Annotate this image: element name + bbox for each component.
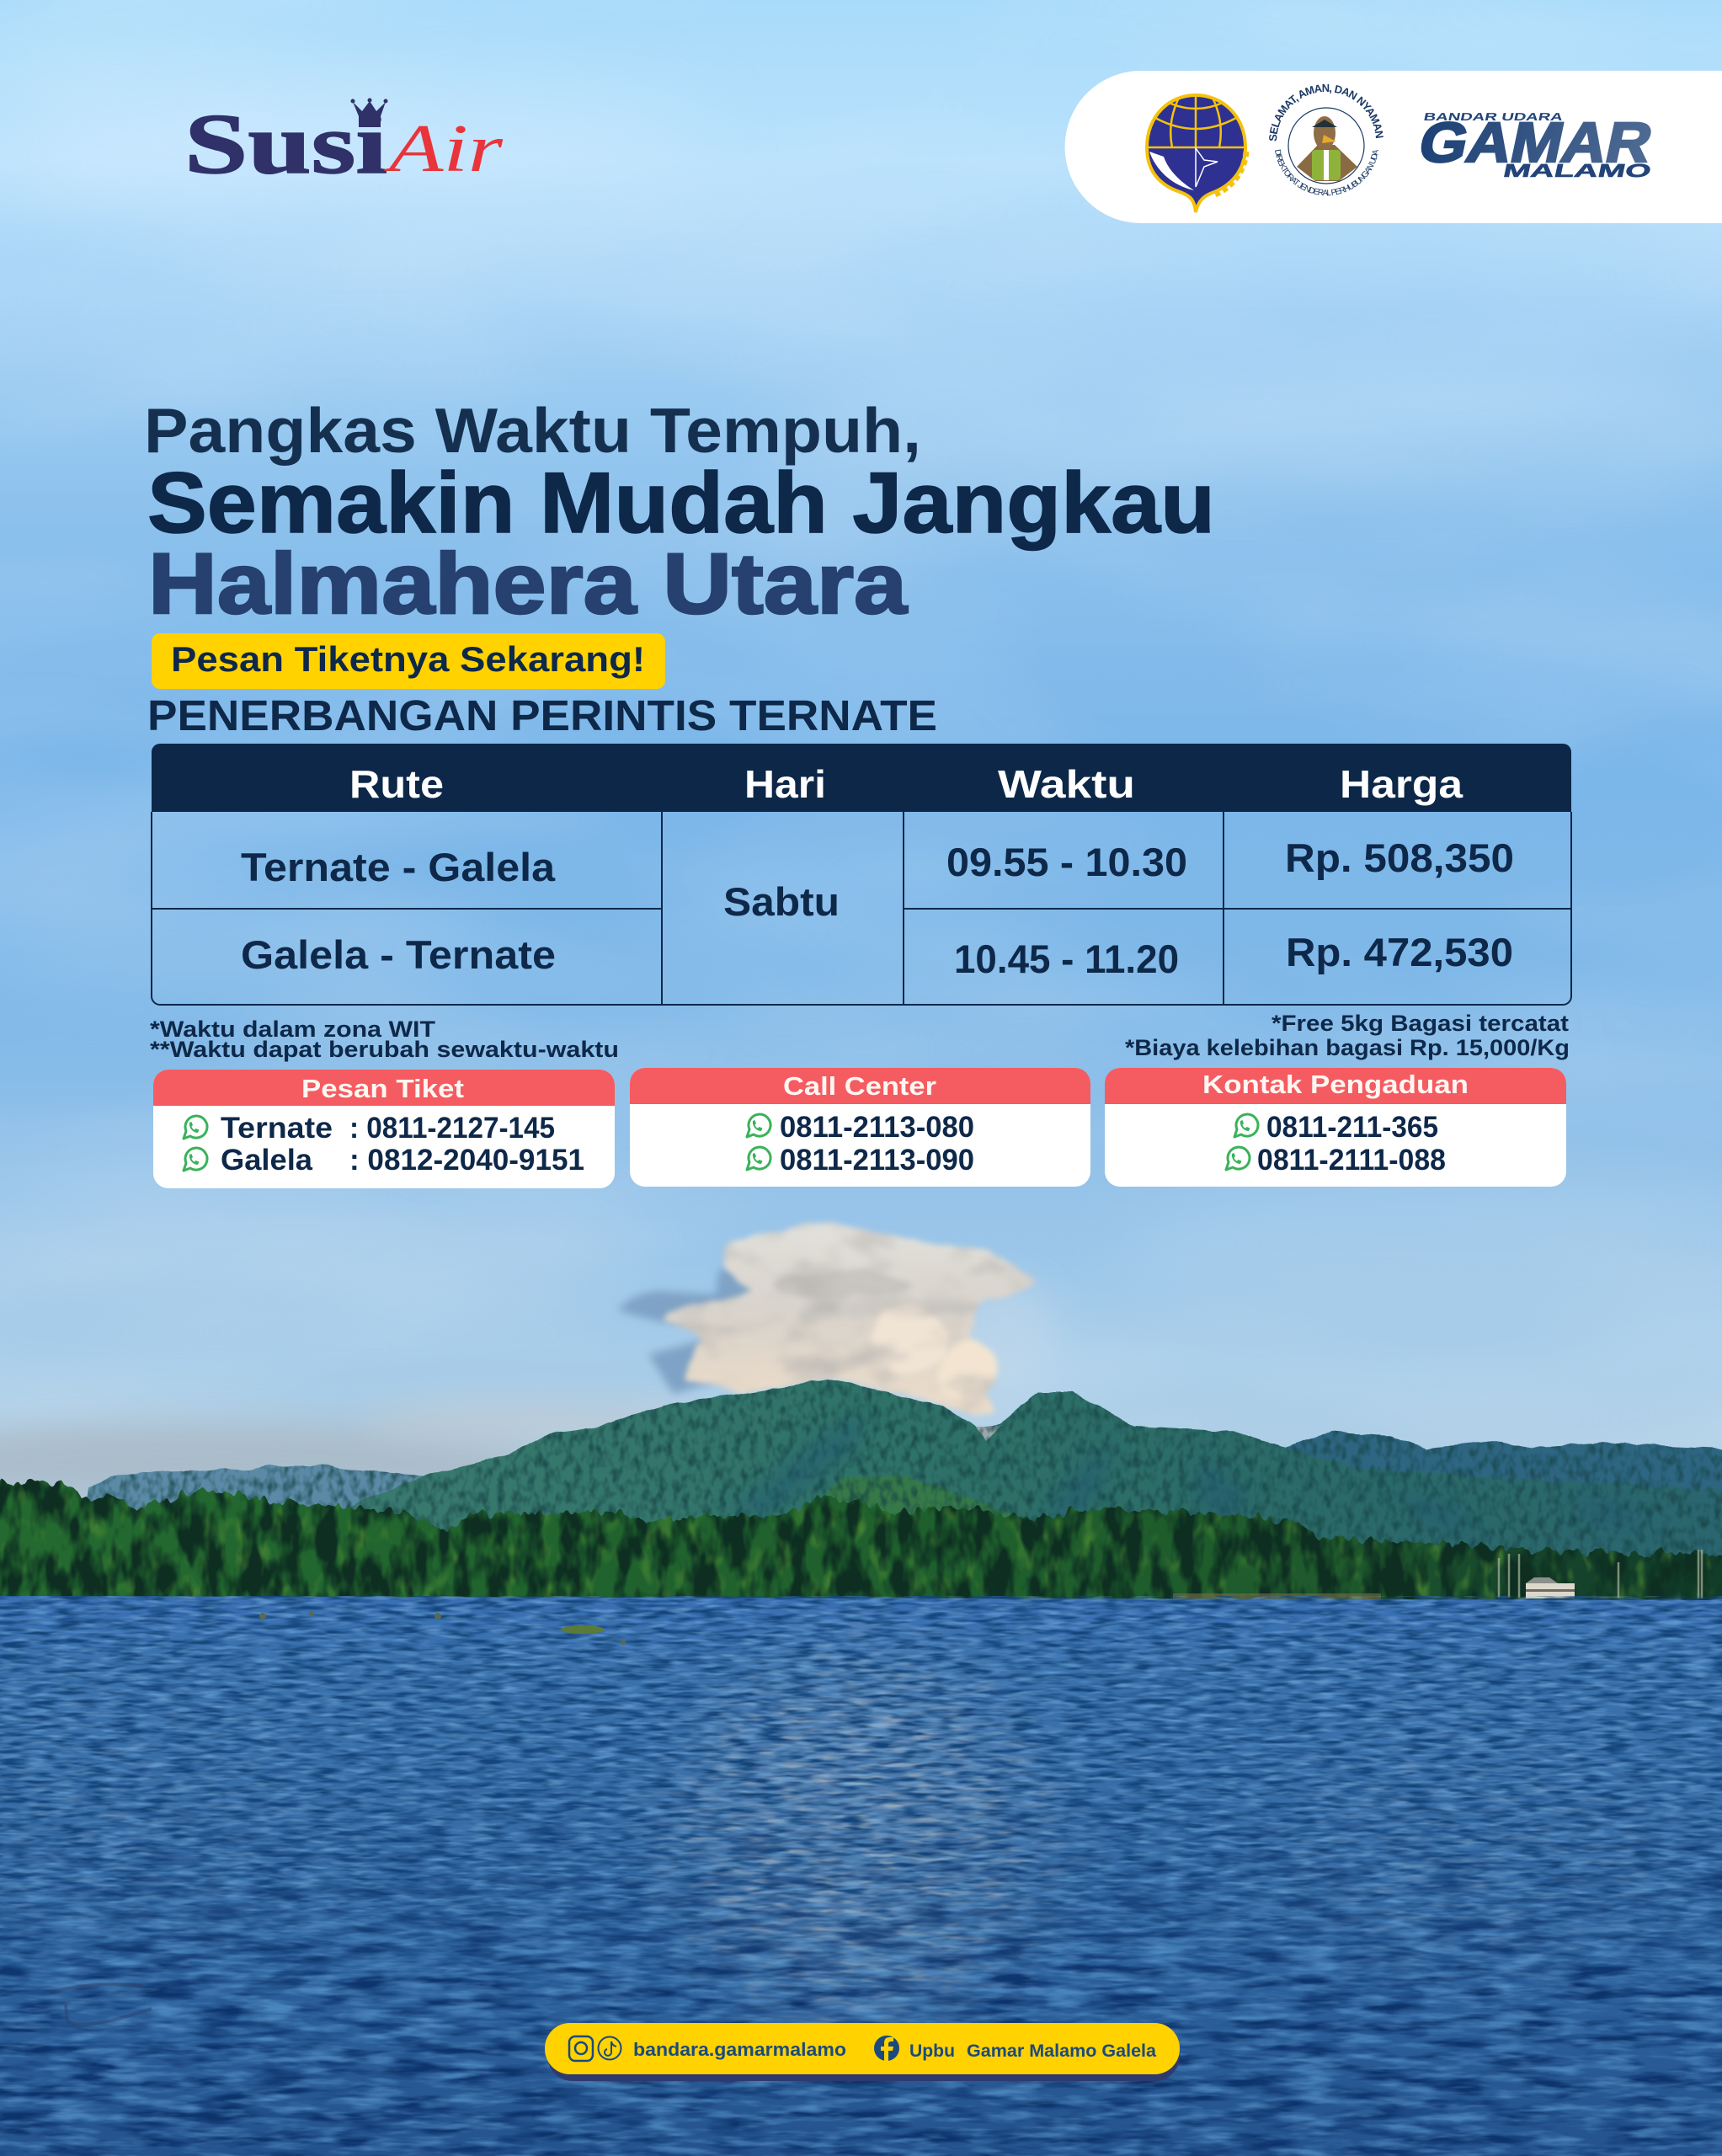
icon: whatsapp bbox=[1234, 1114, 1258, 1137]
schedule table bbox=[152, 744, 1571, 1005]
footer: social media pill bbox=[545, 2023, 1180, 2081]
panel heading: Kontak Pengaduan bbox=[1202, 1070, 1469, 1099]
notes: baggage bbox=[1125, 1011, 1570, 1060]
icon: whatsapp bbox=[747, 1114, 770, 1137]
mountain ravine shadows bbox=[724, 1408, 1650, 1537]
notes: schedule: *Waktu dalam zona WIT bbox=[150, 1017, 436, 1042]
notes: schedule bbox=[150, 1017, 619, 1062]
callout: order now badge: Pesan Tiketnya Sekarang! bbox=[171, 639, 645, 679]
background photo: sky bbox=[0, 0, 1722, 1609]
icon: whatsapp bbox=[747, 1147, 770, 1170]
handle: facebook: Gamar Malamo Galela bbox=[967, 2041, 1156, 2061]
table row: Galela to Ternate: 10.45 - 11.20 bbox=[954, 937, 1179, 981]
table header row: Harga bbox=[1340, 762, 1463, 806]
palm tree line bbox=[0, 1481, 1722, 1610]
headline bbox=[144, 395, 1215, 632]
panel heading: Pesan Tiket bbox=[301, 1074, 464, 1103]
table header row: Hari bbox=[744, 762, 826, 806]
main mountain bbox=[337, 1380, 1722, 1566]
contact: Galela: : 0812-2040-9151 bbox=[349, 1144, 584, 1177]
contact: Ternate: : 0811-2127-145 bbox=[349, 1112, 555, 1145]
logo: Bandar Udara Gamar Malamo bbox=[1414, 110, 1658, 181]
notes: baggage: *Free 5kg Bagasi tercatat bbox=[1272, 1011, 1569, 1036]
contact: Ternate bbox=[221, 1112, 555, 1145]
contact: Ternate: Ternate bbox=[221, 1112, 333, 1145]
notes: baggage: *Biaya kelebihan bagasi Rp. 15,000/Kg bbox=[1125, 1035, 1570, 1060]
table row: Galela to Ternate: Galela - Ternate bbox=[241, 932, 556, 977]
background photo: water bbox=[0, 1596, 1722, 2156]
table header row: Rute bbox=[349, 762, 444, 806]
handle: facebook: Upbu bbox=[909, 2041, 955, 2061]
logo word: Susi: Susi bbox=[184, 97, 387, 192]
shoreline strip bbox=[1173, 1593, 1381, 1599]
phone number: 0811-2113-090 bbox=[780, 1144, 974, 1177]
table row: Ternate to Galela: Ternate - Galela bbox=[241, 845, 556, 889]
volcanic ash plume bbox=[665, 1223, 1034, 1412]
icon: safety mascot badge bbox=[1269, 84, 1383, 195]
volcanic ash plume shadow side bbox=[617, 1263, 775, 1394]
icon: facebook bbox=[874, 2036, 899, 2061]
logo line: Malamo: MALAMO bbox=[1501, 160, 1653, 181]
headline line 3: Halmahera Utara bbox=[148, 536, 908, 632]
phone number: 0811-2113-080 bbox=[780, 1111, 974, 1144]
icon: whatsapp bbox=[184, 1116, 207, 1139]
distant ridge right bbox=[1286, 1432, 1722, 1558]
handle: instagram and tiktok: bandara.gamarmalamo bbox=[633, 2039, 846, 2060]
table row: Ternate to Galela: Rp. 508,350 bbox=[1285, 835, 1514, 880]
panel: ticket booking bbox=[153, 1070, 615, 1188]
icon: tiktok bbox=[598, 2036, 621, 2060]
panel heading: Call Center bbox=[783, 1071, 936, 1101]
table merged cell: day: Sabtu bbox=[723, 879, 840, 924]
headline line 1: Pangkas Waktu Tempuh, bbox=[144, 395, 921, 466]
logo word: Air: Air bbox=[383, 112, 504, 186]
headline line 2: Semakin Mudah Jangkau bbox=[147, 455, 1215, 551]
table row: Galela to Ternate bbox=[241, 930, 1513, 981]
icon: whatsapp bbox=[184, 1148, 207, 1171]
notes: schedule: **Waktu dapat berubah sewaktu-waktu bbox=[150, 1037, 619, 1062]
logo line: Bandar Udara: BANDAR UDARA bbox=[1422, 110, 1565, 123]
phone number: 0811-2111-088 bbox=[1257, 1144, 1446, 1177]
shoreline poles bbox=[1499, 1550, 1702, 1598]
icon: crown bbox=[350, 98, 387, 127]
logo line: Gamar: GAMAR bbox=[1414, 112, 1658, 174]
callout: order now badge bbox=[152, 633, 665, 689]
contact: Galela: Galela bbox=[221, 1144, 313, 1177]
table header row: Waktu bbox=[998, 762, 1135, 806]
icon: instagram bbox=[569, 2036, 593, 2061]
distant ridge left bbox=[84, 1465, 472, 1516]
table header row bbox=[349, 762, 1463, 806]
panel: partner logos bbox=[1064, 71, 1722, 223]
shoreline building bbox=[1526, 1577, 1575, 1598]
Susi Air logo bbox=[184, 97, 504, 192]
low cloud bank on the left horizon bbox=[0, 1280, 1057, 1502]
panel: complaints contact bbox=[1105, 1068, 1566, 1187]
table row: Ternate to Galela bbox=[241, 835, 1514, 889]
panel: call center bbox=[630, 1068, 1090, 1187]
table row: Ternate to Galela: 09.55 - 10.30 bbox=[946, 840, 1187, 884]
icon: whatsapp bbox=[1226, 1147, 1250, 1170]
front hill bbox=[808, 1476, 1027, 1541]
contact: Galela bbox=[221, 1144, 584, 1177]
table row: Galela to Ternate: Rp. 472,530 bbox=[1286, 930, 1513, 974]
phone number: 0811-211-365 bbox=[1266, 1111, 1438, 1144]
section heading: PENERBANGAN PERINTIS TERNATE bbox=[147, 691, 937, 739]
badge slogan: SELAMAT, AMAN, DAN NYAMAN bbox=[1269, 84, 1383, 141]
icon: ministry of transportation emblem bbox=[1147, 95, 1246, 212]
